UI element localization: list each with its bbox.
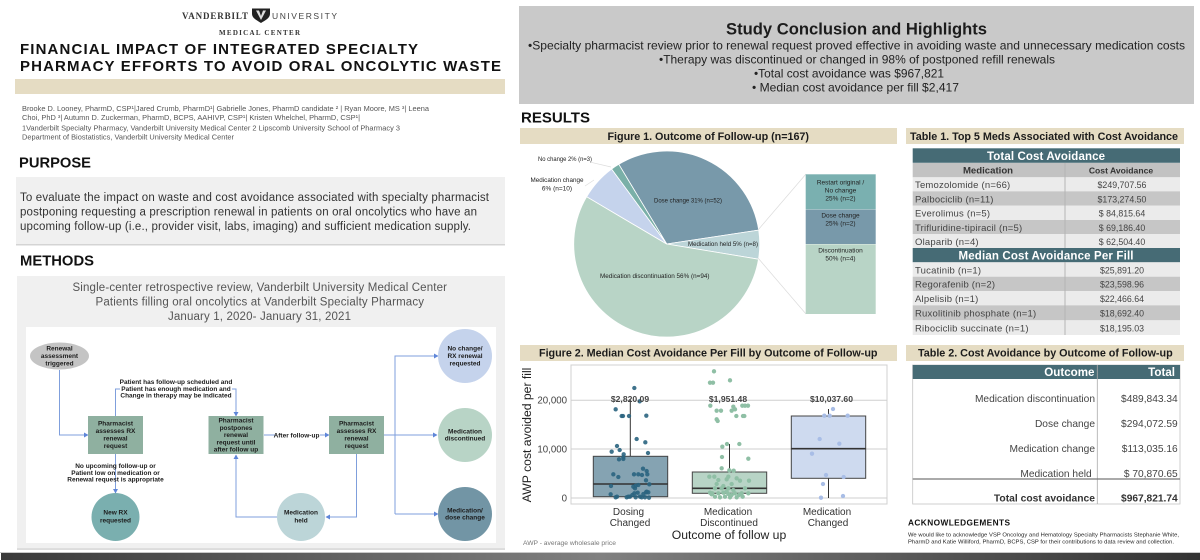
stacked bar: medication held breakdown: No change xyxy=(825,188,857,194)
authors and affiliations: 1Vanderbilt Specialty Pharmacy, Vanderbilt University Medical Center 2 Lipscomb University School of Pharmacy 3 xyxy=(22,124,400,132)
node: pharmacist postpones request: postpones xyxy=(220,425,253,432)
node: dose change xyxy=(438,487,492,541)
node: new RX requested: New RX xyxy=(103,510,128,516)
table 1: top 5 meds xyxy=(913,148,1180,335)
node: pharmacist assesses request again: assesses RX xyxy=(337,428,377,435)
footer bar xyxy=(0,552,1200,560)
table section: total cost avoidance: $ 69,186.40 xyxy=(1099,223,1145,233)
x axis labels: Dosing xyxy=(613,507,644,518)
y axis title: AWP cost avoided per fill xyxy=(520,368,534,502)
table section: median cost avoidance per fill: $25,891.20 xyxy=(1100,265,1144,275)
table section: total cost avoidance: $173,274.50 xyxy=(1098,194,1147,204)
stacked bar: medication held breakdown: 25% (n=2) xyxy=(825,221,856,228)
authors and affiliations: Choi, PhD ³| Autumn D. Zuckerman, PharmD, BCPS, AAHIVP, CSP¹| Kristen Whelchel, PharmD, CSP¹| xyxy=(22,113,360,122)
acknowledgements: We would like to acknowledge VSP Oncology and Hematology Specialty Pharmacists Stephanie White, xyxy=(908,532,1179,538)
label: renewal criteria xyxy=(67,463,164,484)
authors and affiliations xyxy=(22,104,430,142)
table 2: cost avoidance by outcome: $113,035.16 xyxy=(1122,444,1178,455)
node: no change xyxy=(438,329,492,383)
node: dose change: dose change xyxy=(445,514,485,522)
pie labels: Medication discontinuation 56% (n=94) xyxy=(600,273,710,280)
stacked bar: medication held breakdown xyxy=(806,174,876,314)
table 2: cost avoidance by outcome: Medication change xyxy=(1009,444,1095,455)
x axis labels: Medication xyxy=(704,507,752,518)
heading: table 2 xyxy=(906,345,1184,361)
table section: median cost avoidance per fill: $22,466.64 xyxy=(1100,294,1144,304)
methods description xyxy=(72,282,447,323)
node: pharmacist postpones request: Pharmacist xyxy=(218,418,254,424)
title: FINANCIAL IMPACT OF INTEGRATED SPECIALTY xyxy=(20,41,418,58)
table section: total cost avoidance xyxy=(913,148,1180,248)
node: pharmacist postpones request: request until xyxy=(216,440,256,446)
acknowledgements: ACKNOWLEDGEMENTS xyxy=(908,517,1010,527)
table 2: cost avoidance by outcome: $967,821.74 xyxy=(1121,494,1178,505)
acknowledgements: PharmD and Katie Williford, PharmD, BCPS, CSP for their contributions to data review and collection. xyxy=(908,540,1174,546)
table section: total cost avoidance: Everolimus (n=5) xyxy=(915,208,990,220)
median value labels: $1,951.48 xyxy=(709,394,747,404)
label: renewal criteria: Renewal request is appropriate xyxy=(67,476,164,484)
arrows xyxy=(60,356,438,517)
stacked bar: medication held breakdown: Discontinuation xyxy=(818,247,863,254)
heading: figure 1: Figure 1. Outcome of Follow-up (n=167) xyxy=(608,131,809,143)
label: renewal criteria: Patient low on medication or xyxy=(71,470,160,477)
median value labels: $2,820.09 xyxy=(611,394,649,404)
table section: total cost avoidance: Cost Avoidance xyxy=(1089,166,1153,176)
label: postpone criteria: Patient has follow-up scheduled and xyxy=(120,379,232,386)
table section: total cost avoidance: Olaparib (n=4) xyxy=(915,237,979,248)
node: pharmacist assesses request again: renewal xyxy=(344,436,369,442)
logo: Vanderbilt University Medical Center xyxy=(182,8,337,37)
label: renewal criteria: No upcoming follow-up or xyxy=(75,463,156,470)
node: pharmacist assesses request: request xyxy=(104,443,128,450)
slice: medication held xyxy=(667,230,760,259)
node: dose change: Medication/ xyxy=(447,508,483,514)
node: renewal assessment triggered: Renewal xyxy=(46,346,73,352)
table section: total cost avoidance: Palbociclib (n=11) xyxy=(915,194,994,205)
node: pharmacist assesses request again xyxy=(329,416,384,454)
x axis labels xyxy=(610,507,851,529)
table section: total cost avoidance: $249,707.56 xyxy=(1098,180,1147,190)
node: pharmacist postpones request xyxy=(208,416,264,454)
median value labels: $10,037.60 xyxy=(810,394,853,404)
box: medication changed xyxy=(791,407,866,500)
heading: results: RESULTS xyxy=(521,110,590,126)
table section: total cost avoidance: Trifluridine-tipiracil (n=5) xyxy=(915,223,1022,234)
node: medication discontinued: Medication xyxy=(448,428,482,436)
node: pharmacist postpones request: after follow up xyxy=(214,446,258,454)
table section: median cost avoidance per fill xyxy=(913,248,1180,335)
panel: purpose xyxy=(16,177,505,246)
slice: medication change xyxy=(587,169,667,244)
table 2: cost avoidance by outcome: Total cost avoidance xyxy=(994,494,1095,505)
pie labels: No change 2% (n=3) xyxy=(538,156,592,163)
table section: median cost avoidance per fill: Tucatinib (n=1) xyxy=(915,265,981,276)
table section: median cost avoidance per fill: $23,598.96 xyxy=(1100,280,1144,290)
node: pharmacist assesses request: Pharmacist xyxy=(98,420,134,428)
heading: purpose: PURPOSE xyxy=(19,156,91,172)
methods description: Single-center retrospective review, Vanderbilt University Medical Center xyxy=(72,282,447,294)
methods description: January 1, 2020- January 31, 2021 xyxy=(168,311,351,323)
slice: dose change xyxy=(619,151,759,244)
median value labels xyxy=(611,394,853,404)
node: no change: requested xyxy=(449,360,481,368)
table section: total cost avoidance: $ 62,504.40 xyxy=(1099,237,1145,247)
authors and affiliations: Brooke D. Looney, PharmD, CSP¹|Jared Crumb, PharmD¹| Gabrielle Jones, PharmD candidate ² | Ryan Moore, MS ³| Leena xyxy=(22,104,430,113)
logo: Vanderbilt University Medical Center: MEDICAL CENTER xyxy=(219,29,301,37)
label: postpone criteria: Patient has enough medication and xyxy=(121,386,231,393)
table section: median cost avoidance per fill: $18,195.03 xyxy=(1100,324,1144,334)
box: medication discontinued xyxy=(692,369,767,499)
table section: total cost avoidance: Temozolomide (n=66) xyxy=(915,180,1010,191)
node: medication discontinued: discontinued xyxy=(445,436,485,442)
heading: figure 2 xyxy=(520,345,897,361)
table section: median cost avoidance per fill: Ribociclib succinate (n=1) xyxy=(915,324,1029,335)
x axis labels: Medication xyxy=(803,507,851,518)
table 2: cost avoidance by outcome: Dose change xyxy=(1035,419,1095,430)
table section: median cost avoidance per fill: Median Cost Avoidance Per Fill xyxy=(958,250,1134,262)
y axis labels: 10,000 xyxy=(537,444,568,456)
panel: purpose: postponing requesting a prescription renewal in patients on oral oncolytics who have an xyxy=(20,206,477,218)
table 2: cost avoidance by outcome: Total xyxy=(1148,366,1175,379)
panel: study conclusion and highlights: •Total cost avoidance was $967,821 xyxy=(754,66,944,80)
table 2: cost avoidance by outcome: $489,843.34 xyxy=(1121,394,1178,405)
y axis labels: 0 xyxy=(562,494,568,504)
heading: table 2: Table 2. Cost Avoidance by Outcome of Follow-up xyxy=(918,348,1173,360)
logo: Vanderbilt University Medical Center: UNIVERSITY xyxy=(272,11,337,21)
stacked bar: medication held breakdown: 25% (n=2) xyxy=(825,196,856,202)
pie labels xyxy=(530,156,758,280)
table section: total cost avoidance: Total Cost Avoidance xyxy=(987,151,1105,163)
node: new RX requested xyxy=(92,493,140,541)
panel: purpose: upcoming follow-up (i.e., provider visit, labs, imaging) and sufficient medication supply. xyxy=(20,221,471,233)
label: after follow-up: After follow-up xyxy=(274,432,319,440)
chart: outcome of follow-up pie xyxy=(530,151,876,337)
slice: no change xyxy=(612,164,667,244)
table 2: cost avoidance by outcome: Medication held xyxy=(1020,469,1092,480)
stacked bar: medication held breakdown: Restart original / xyxy=(817,180,864,186)
heading: figure 2: Figure 2. Median Cost Avoidance Per Fill by Outcome of Follow-up xyxy=(539,348,878,360)
node: renewal assessment triggered: assessment xyxy=(41,353,79,360)
node: medication held: held xyxy=(294,518,308,524)
title accent bar xyxy=(15,79,505,94)
table section: total cost avoidance: $ 84,815.64 xyxy=(1099,208,1145,218)
node: pharmacist assesses request again: request xyxy=(345,443,369,450)
node: pharmacist assesses request again: Pharmacist xyxy=(339,420,375,428)
title xyxy=(20,41,501,75)
node: renewal assessment triggered xyxy=(30,342,89,370)
y axis labels xyxy=(537,396,568,504)
title: PHARMACY EFFORTS TO AVOID ORAL ONCOLYTIC WASTE xyxy=(20,58,501,75)
table 2: cost avoidance by outcome: $ 70,870.65 xyxy=(1124,469,1178,480)
node: pharmacist assesses request xyxy=(88,416,143,454)
table section: median cost avoidance per fill: $18,692.40 xyxy=(1100,309,1144,319)
y axis labels: 20,000 xyxy=(537,396,568,407)
stacked bar: medication held breakdown: 50% (n=4) xyxy=(825,256,856,262)
authors and affiliations: Department of Biostatistics, Vanderbilt University Medical Center xyxy=(22,132,235,142)
panel: study conclusion and highlights: •Specialty pharmacist review prior to renewal request proved effective in avoiding waste and unnecessary medication costs xyxy=(528,38,1185,52)
heading: methods: METHODS xyxy=(20,254,94,270)
stacked bar: medication held breakdown: Dose change xyxy=(821,212,860,220)
pie labels: Medication held 5% (n=8) xyxy=(688,241,758,248)
node: no change: No change/ xyxy=(447,346,483,352)
node: medication discontinued xyxy=(438,408,492,462)
label: postpone criteria xyxy=(120,379,232,400)
table section: total cost avoidance: Medication xyxy=(963,166,1013,177)
node: pharmacist assesses request: assesses RX xyxy=(96,428,136,435)
footnote: AWP - average wholesale price xyxy=(523,540,616,547)
logo: Vanderbilt University Medical Center: VANDERBILT xyxy=(182,11,248,21)
x axis labels: Discontinued xyxy=(700,518,758,529)
pie labels: Medication change xyxy=(530,177,584,184)
node: pharmacist assesses request: renewal xyxy=(103,436,128,442)
acknowledgements xyxy=(908,517,1179,546)
panel: study conclusion and highlights: •Therapy was discontinued or changed in 98% of postponed refill renewals xyxy=(659,52,1055,66)
table 2: cost avoidance by outcome: Medication discontinuation xyxy=(975,394,1095,405)
pie labels: 6% (n=10) xyxy=(542,186,572,192)
node: new RX requested: requested xyxy=(100,518,131,524)
methods description: Patients filling oral oncolytics at Vanderbilt Specialty Pharmacy xyxy=(96,296,424,308)
heading: figure 1 xyxy=(520,128,897,144)
flowchart xyxy=(26,327,496,543)
x axis title: Outcome of follow up xyxy=(672,528,786,542)
table section: median cost avoidance per fill: Ruxolitinib phosphate (n=1) xyxy=(915,309,1036,320)
x axis labels: Changed xyxy=(808,518,848,529)
chart: box plot of median cost avoidance xyxy=(520,365,887,547)
table 2: cost avoidance by outcome: Outcome xyxy=(1044,366,1095,379)
panel: methods xyxy=(17,276,505,550)
panel: study conclusion and highlights xyxy=(519,6,1194,104)
table 2: cost avoidance by outcome xyxy=(913,365,1180,505)
node: pharmacist postpones request: renewal xyxy=(224,432,248,439)
pie labels: Dose change 31% (n=52) xyxy=(654,198,722,205)
slice: medication discontinuation xyxy=(574,197,758,337)
node: no change: RX renewal xyxy=(447,353,483,360)
node: medication held xyxy=(277,493,325,541)
heading: table 1: Table 1. Top 5 Meds Associated with Cost Avoidance xyxy=(910,131,1178,143)
node: medication held: Medication xyxy=(284,510,318,516)
table 2: cost avoidance by outcome: $294,072.59 xyxy=(1121,419,1178,430)
table section: median cost avoidance per fill: Alpelisib (n=1) xyxy=(915,294,978,305)
table section: median cost avoidance per fill: Regorafenib (n=2) xyxy=(915,280,995,291)
panel: study conclusion and highlights: Study Conclusion and Highlights xyxy=(726,20,987,38)
node: renewal assessment triggered: triggered xyxy=(45,360,74,368)
panel: study conclusion and highlights: • Median cost avoidance per fill $2,417 xyxy=(752,80,959,94)
label: postpone criteria: Change in therapy may be indicated xyxy=(120,392,232,400)
x axis labels: Changed xyxy=(610,518,650,529)
box: dosing changed xyxy=(593,386,668,500)
panel: purpose: To evaluate the impact on waste and cost avoidance associated with specialty pharmacist xyxy=(20,192,490,204)
